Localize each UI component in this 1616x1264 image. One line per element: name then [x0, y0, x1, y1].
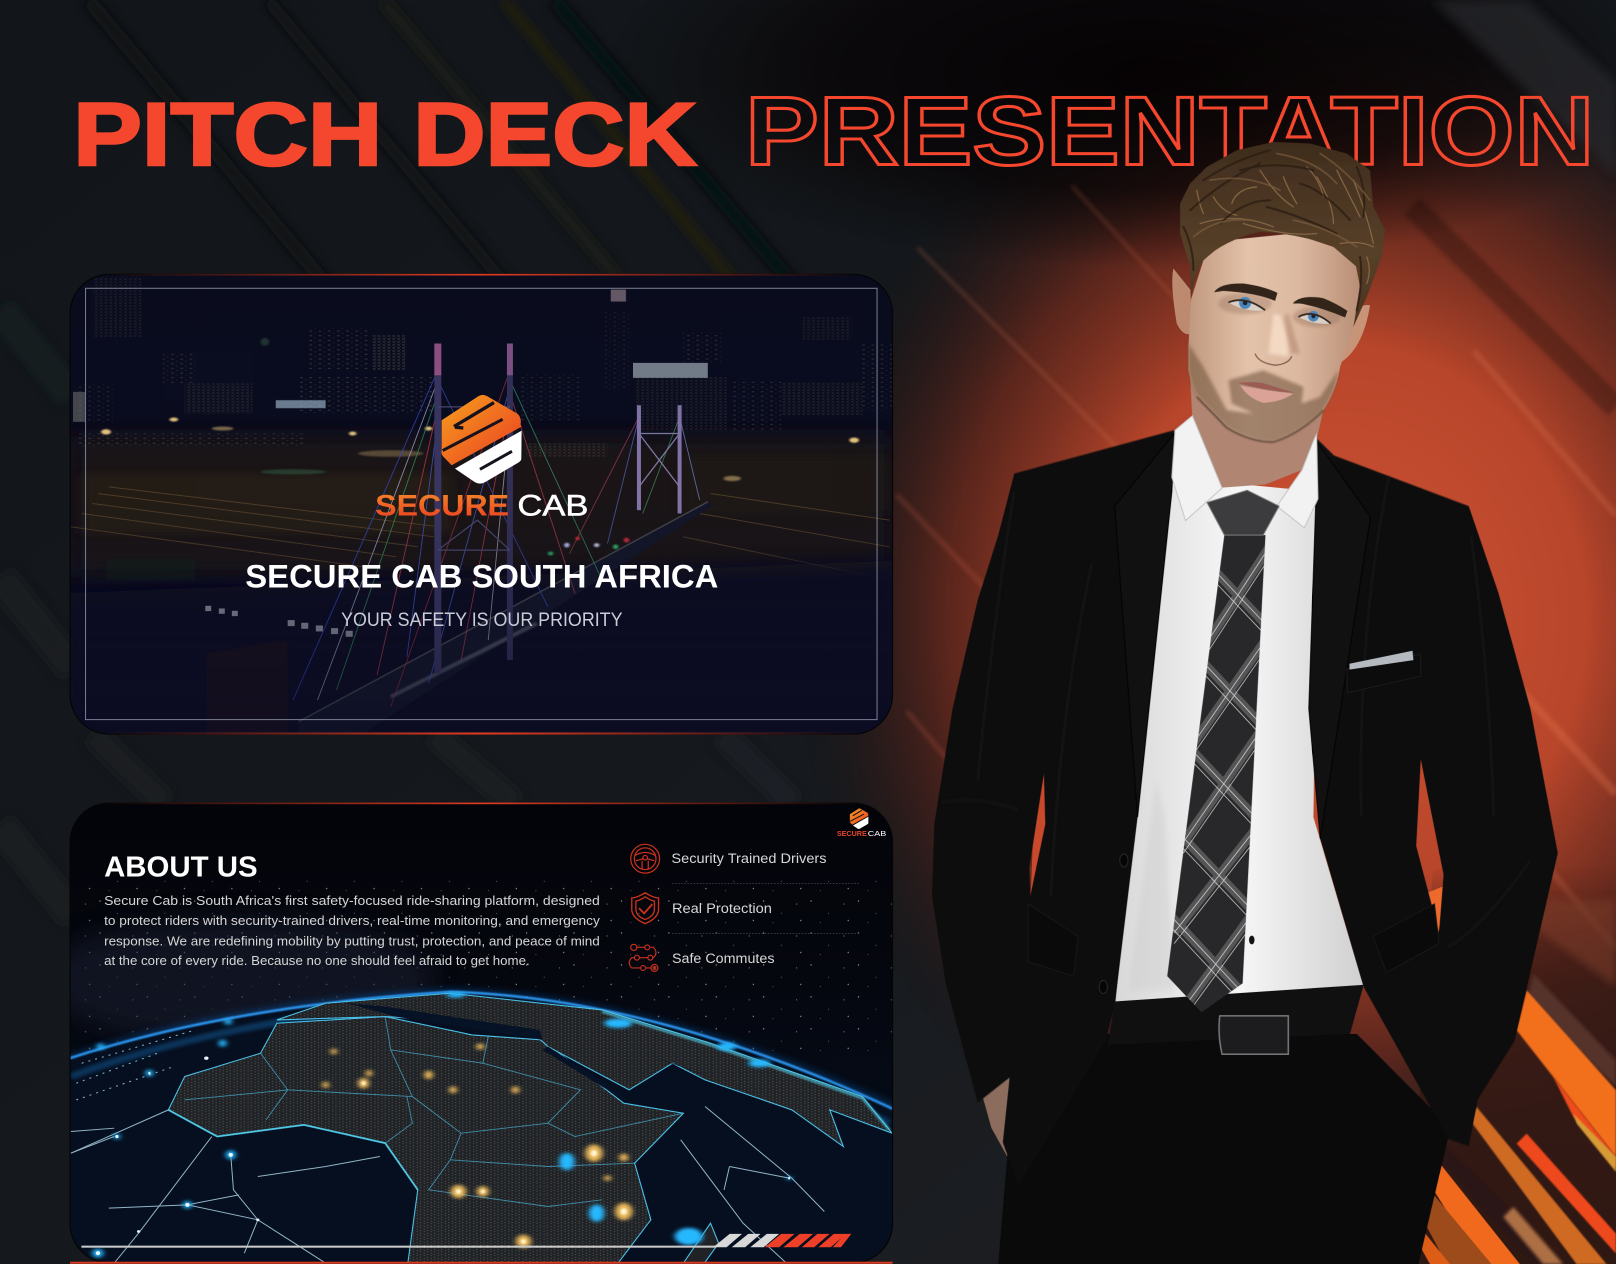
hair — [1180, 142, 1385, 327]
about us body text — [104, 893, 600, 968]
cover tagline: YOUR SAFETY IS OUR PRIORITY — [341, 609, 622, 631]
gap highlights behind arms — [1031, 768, 1451, 979]
cover slide night city photo — [60, 260, 910, 740]
businessman portrait: body — [932, 376, 1558, 1264]
logo wordmark: CAB — [517, 490, 588, 523]
small logo: CAB — [868, 829, 886, 838]
earth globe with Africa network — [60, 990, 895, 1264]
tie — [1167, 535, 1265, 1012]
ears — [1172, 269, 1191, 334]
network lines over oceans — [71, 1030, 824, 1263]
land masses — [168, 993, 892, 1264]
city light glows — [322, 1043, 632, 1248]
cover heading: SECURE CAB SOUTH AFRICA — [245, 559, 718, 595]
logo wordmark — [375, 490, 588, 523]
panel: about us slide — [41, 803, 895, 1264]
title: PITCH DECK: PITCH — [73, 85, 382, 184]
about us body text: at the core of every ride. Because no one should feel afraid to get home. — [104, 953, 530, 968]
left hand — [982, 1077, 1010, 1157]
about us body text: Secure Cab is South Africa's first safety-focused ride-sharing platform, designed — [104, 893, 600, 908]
title: PRESENTATION outlined: PRESENTATION — [745, 76, 1594, 186]
face — [1188, 234, 1360, 442]
icon: steering wheel — [631, 844, 660, 873]
logo: Secure Cab hexagon mark — [441, 395, 522, 484]
title: PITCH DECK — [73, 85, 697, 184]
list item: Security Trained Drivers: Security Trained Drivers — [671, 850, 827, 866]
trousers — [998, 1034, 1450, 1264]
small logo — [837, 808, 886, 838]
icon: shield — [632, 893, 659, 924]
list item: Safe Commutes: Safe Commutes — [672, 950, 775, 966]
eyes — [1228, 300, 1265, 311]
list item: Real Protection: Real Protection — [672, 900, 772, 916]
icon: route — [629, 944, 658, 971]
collar — [1172, 416, 1222, 521]
panel: cover slide — [60, 260, 910, 740]
about us body text: response. We are redefining mobility by putting trust, protection, and peace of mind — [104, 933, 600, 948]
about us heading: ABOUT US — [104, 851, 258, 883]
lips — [1237, 382, 1295, 393]
jacket — [932, 430, 1558, 1186]
jacket folds — [941, 477, 1530, 947]
eyebrows — [1214, 283, 1277, 301]
shirt — [1115, 477, 1364, 1009]
eye socket shading — [1218, 293, 1341, 327]
lapels — [1115, 434, 1174, 817]
neck — [1190, 376, 1329, 488]
belt — [1108, 985, 1364, 1045]
title: PITCH DECK: DECK — [413, 85, 697, 184]
small logo: SECURE — [837, 829, 867, 838]
businessman portrait: head — [1172, 142, 1385, 442]
footer rule and stripes — [81, 1234, 851, 1248]
list dividers — [672, 883, 860, 933]
about us body text: to protect riders with security-trained drivers, real-time monitoring, and emergency — [104, 913, 600, 928]
pocket and flaps — [1347, 654, 1421, 693]
nose — [1268, 314, 1288, 357]
logo wordmark: SECURE — [375, 490, 509, 523]
beard — [1188, 344, 1338, 442]
bottom right speed streaks — [1417, 867, 1616, 1264]
